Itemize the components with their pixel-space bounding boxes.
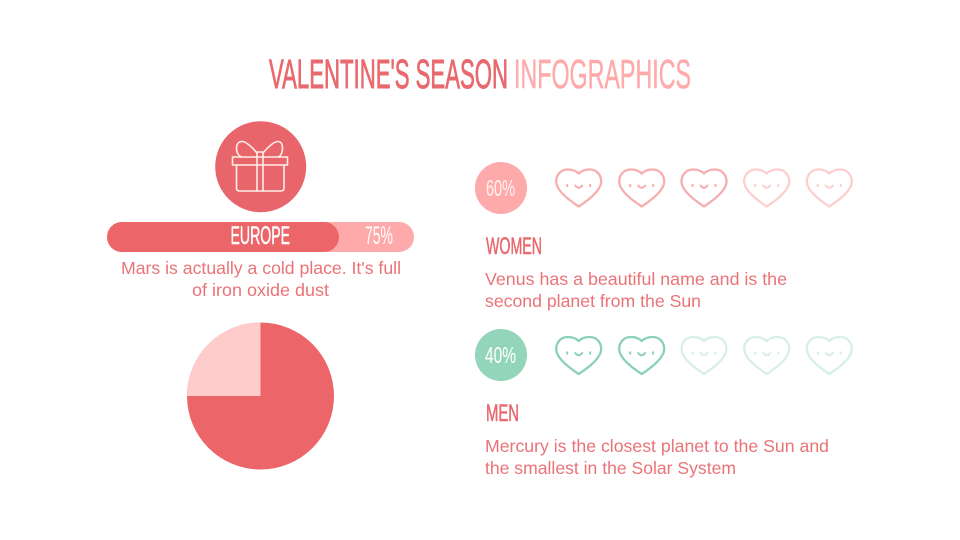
- hearts: women: [556, 170, 852, 206]
- hearts: men: [556, 337, 852, 374]
- text: women description: Venus has a beautiful name and is the: [485, 269, 787, 289]
- text: women description: second planet from the Sun: [485, 291, 701, 311]
- badge: 40%: 40%: [485, 342, 516, 368]
- text: men description: the smallest in the Solar System: [485, 458, 736, 478]
- badge: 60%: 60%: [486, 175, 515, 201]
- pie chart: [187, 322, 334, 470]
- text: men description: Mercury is the closest planet to the Sun and: [485, 436, 829, 456]
- heading: women: WOMEN: [486, 233, 542, 260]
- badge: 60%: [475, 162, 527, 214]
- text: Europe description: of iron oxide dust: [192, 280, 329, 300]
- badge: 40%: [475, 329, 527, 381]
- bar: Europe 75%: EUROPE: [230, 222, 290, 250]
- heading: men: MEN: [486, 400, 519, 427]
- icon: gift in circle: [215, 121, 306, 212]
- text: women description: [485, 269, 787, 311]
- text: Europe description: [121, 258, 401, 300]
- bar: Europe 75%: 75%: [365, 222, 393, 250]
- bar: Europe 75%: [107, 222, 414, 252]
- text: men description: [485, 436, 829, 478]
- title: VALENTINE'S SEASON: [269, 51, 508, 97]
- text: Europe description: Mars is actually a cold place. It's full: [121, 258, 401, 278]
- title: INFOGRAPHICS: [514, 51, 691, 97]
